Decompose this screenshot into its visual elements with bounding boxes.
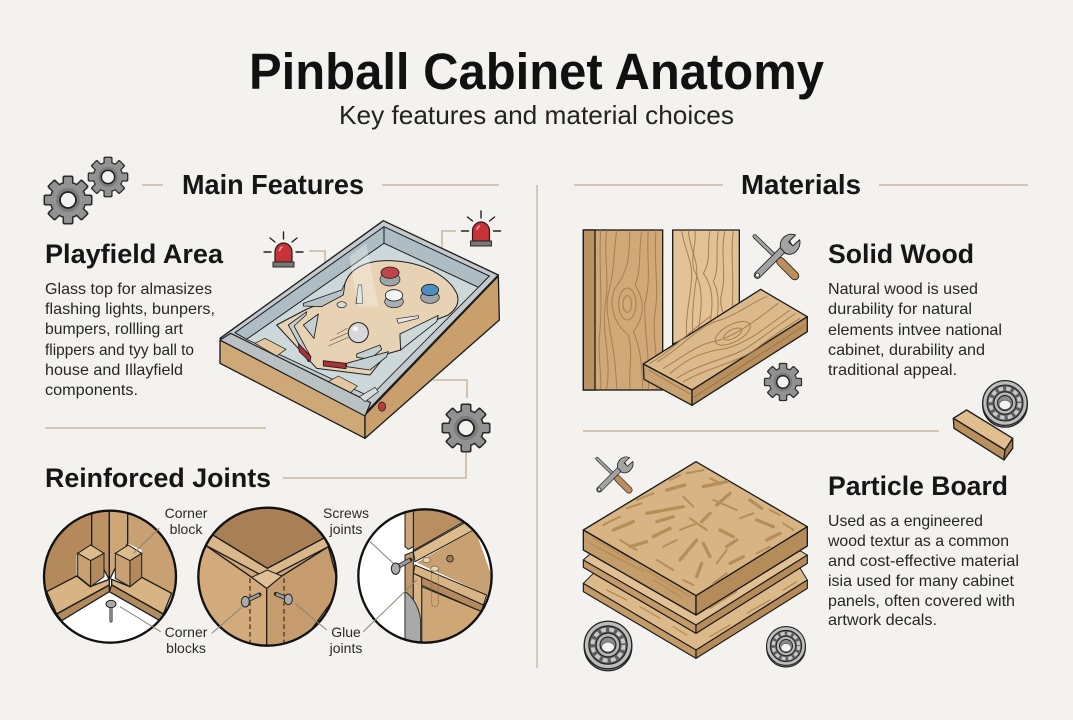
diagram: reinforced joints — [40, 500, 497, 650]
label: glue joints: Glue — [331, 624, 361, 640]
top sheet — [583, 462, 807, 615]
text block: particle board description: wood textur as a common — [827, 533, 1009, 550]
glass reflection — [349, 243, 378, 307]
illustration: solid wood planks — [583, 230, 807, 405]
text block: particle board description: isia used for many cabinet — [828, 573, 1015, 590]
text block: solid wood description: traditional appeal. — [828, 362, 957, 379]
illustration: particle board stack — [583, 462, 807, 658]
text block: playfield description: components. — [45, 382, 138, 399]
flippers — [323, 361, 346, 369]
joint circle: corner blocks — [40, 507, 180, 643]
plank two — [673, 230, 739, 344]
posts — [356, 285, 363, 303]
heading: main features: Main Features — [182, 169, 364, 200]
text block: playfield description: bumpers, rollling art — [45, 321, 184, 338]
icon: right alarm light — [462, 211, 500, 246]
text block: playfield description: Glass top for almasizes — [45, 281, 212, 298]
plank one — [583, 230, 663, 390]
text block: solid wood description — [828, 281, 1002, 379]
text block: particle board description — [827, 513, 1019, 629]
heading: particle board: Particle Board — [828, 471, 1008, 501]
pop bumpers — [380, 273, 400, 286]
icon: gears — [44, 157, 128, 224]
label: corner blocks: Corner — [165, 624, 207, 640]
label: glue joints: joints — [329, 640, 362, 656]
middle sheet — [583, 551, 807, 633]
front rail — [220, 333, 371, 416]
text block: particle board description: Used as a engineered — [828, 513, 983, 530]
subtitle: Key features and material choices — [339, 100, 734, 130]
icon: wrench and screwdriver — [755, 234, 800, 277]
joint circle: glue — [358, 507, 497, 650]
red start button — [378, 402, 386, 411]
heading: reinforced joints: Reinforced Joints — [45, 463, 271, 493]
text block: particle board description: panels, often covered with — [828, 593, 1015, 610]
icon: cabinet gear — [442, 404, 490, 452]
icon: bearing, bottom left — [584, 621, 632, 671]
label: corner block: Corner — [165, 505, 207, 521]
inner walls — [235, 227, 384, 339]
angled board — [643, 289, 807, 405]
icon: left alarm light — [264, 232, 303, 267]
label: corner block: block — [170, 521, 203, 537]
infographic canvas — [42, 52, 1028, 672]
text block: particle board description: and cost-effective material — [828, 553, 1019, 570]
text block: playfield description — [45, 281, 215, 399]
text block: particle board description: artwork decals. — [828, 612, 937, 629]
label: screws joints: Screws — [323, 505, 369, 521]
leader lines: cabinet callouts — [283, 231, 467, 478]
floor — [247, 243, 478, 397]
heading: playfield area: Playfield Area — [45, 239, 224, 269]
icon: small wood block — [953, 410, 1013, 460]
slingshots and guides — [400, 315, 438, 350]
text block: solid wood description: cabinet, durability and — [828, 342, 985, 359]
title: Pinball Cabinet Anatomy — [249, 43, 825, 100]
illustration: pinball cabinet — [220, 221, 499, 438]
icon: bearing, bottom right — [767, 627, 805, 667]
text block: solid wood description: Natural wood is used — [828, 281, 978, 298]
icon: wood gear — [764, 363, 802, 401]
rim — [220, 221, 498, 413]
text block: playfield description: house and Illayfield — [45, 362, 183, 379]
heading: materials: Materials — [741, 169, 861, 200]
label: screws joints: joints — [329, 521, 362, 537]
joint circle: screws — [197, 506, 338, 647]
playfield surface — [277, 261, 458, 375]
pinball — [348, 323, 368, 343]
heading: solid wood: Solid Wood — [828, 239, 974, 269]
shooter lane — [359, 387, 378, 402]
lock-down panels — [255, 338, 286, 356]
text block: solid wood description: elements intvee national — [828, 322, 1002, 339]
text block: playfield description: flashing lights, bunpers, — [45, 301, 215, 318]
icon: bearing, top right — [983, 381, 1027, 427]
icon: wrench and screwdriver, particle board — [597, 457, 633, 491]
bottom sheet — [583, 568, 807, 658]
label: corner blocks: blocks — [166, 640, 206, 656]
text block: solid wood description: durability for natural — [828, 301, 972, 318]
cabinet wood sides — [220, 340, 365, 438]
text block: playfield description: flippers and tyy ball to — [45, 342, 194, 359]
